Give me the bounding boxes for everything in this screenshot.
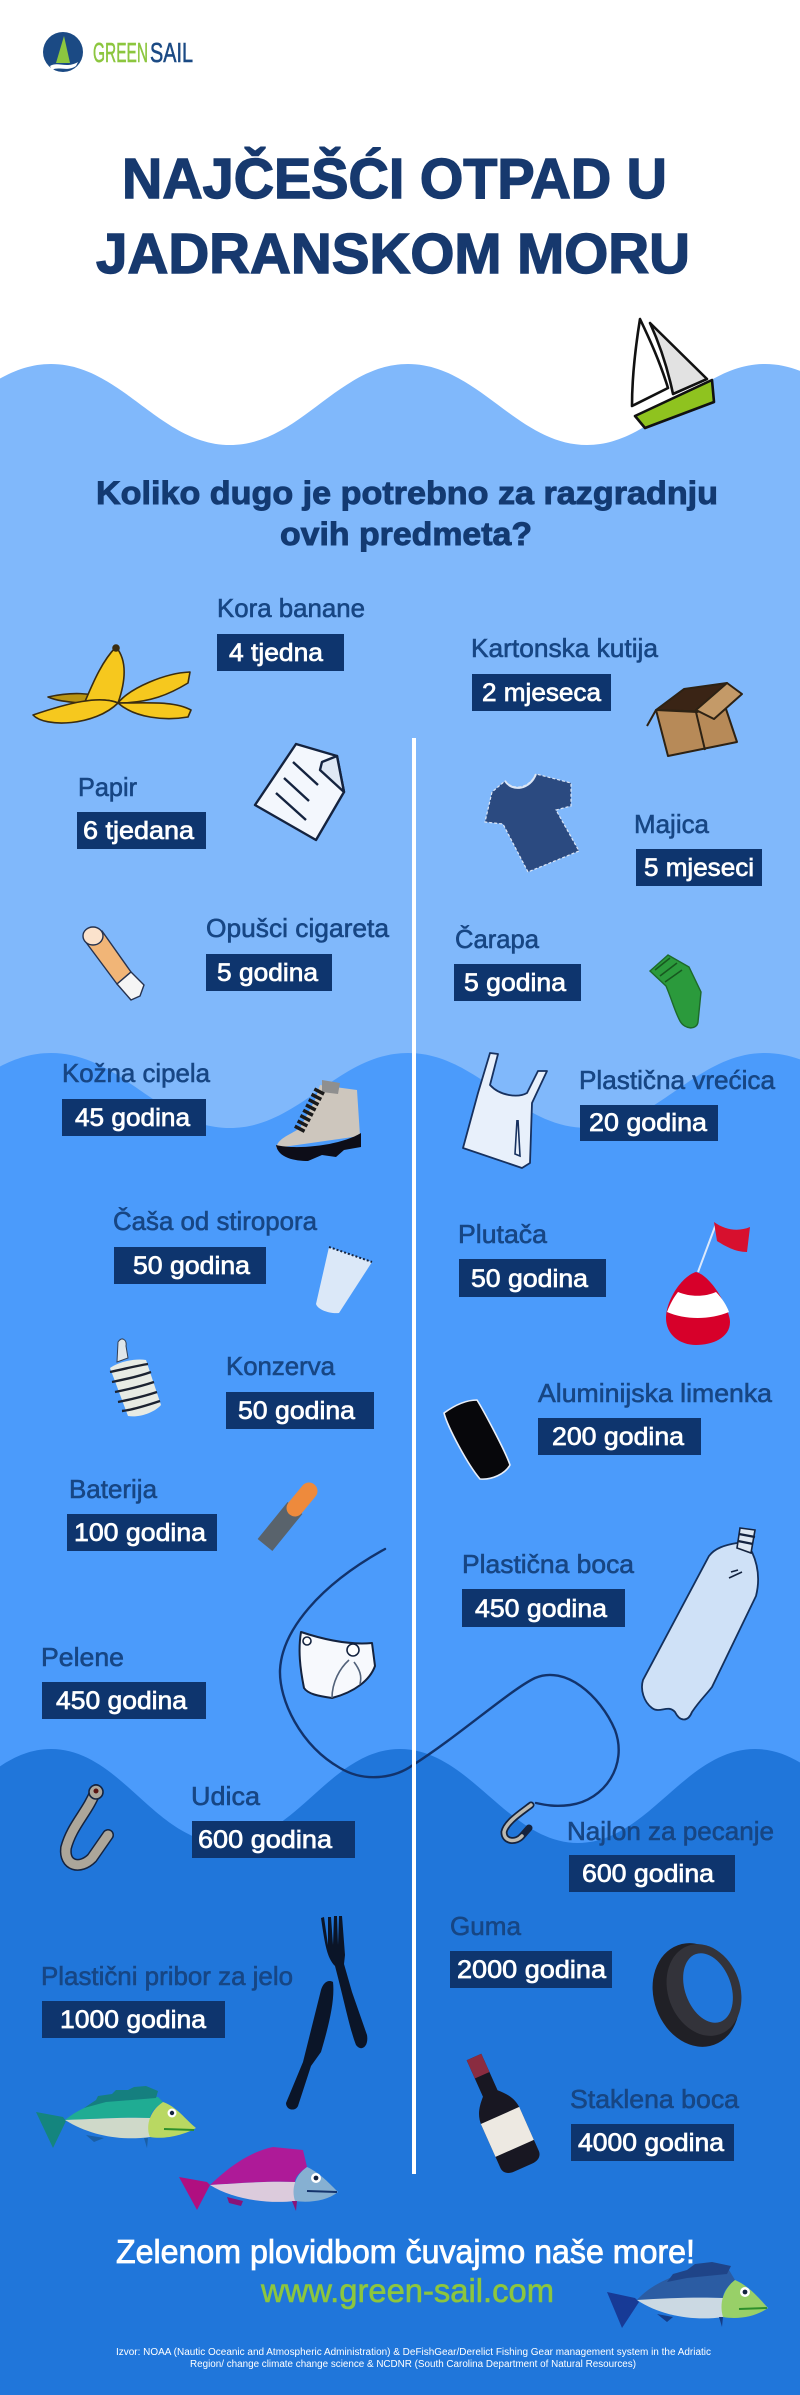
item: Kartonska kutija	[471, 633, 742, 756]
item: Pelene	[41, 1632, 375, 1719]
title: NAJČEŠĆI OTPAD U	[122, 146, 667, 211]
icon: sailboat	[632, 319, 714, 428]
duration badge	[206, 954, 332, 991]
icon: foam cup	[316, 1247, 372, 1313]
item: Kožna cipela	[62, 1058, 361, 1161]
item: Opušci cigareta	[83, 913, 390, 1000]
icon: plastic bottle	[642, 1528, 758, 1720]
logo: Green Sail	[43, 32, 193, 72]
label: Plastični pribor za jelo	[41, 1961, 293, 1991]
duration badge: 50 godina	[238, 1397, 355, 1425]
item: Najlon za pecanje	[504, 1805, 774, 1892]
duration badge	[459, 1259, 606, 1297]
duration badge	[42, 1682, 206, 1719]
text block: sources	[116, 2347, 711, 2370]
duration badge	[114, 1247, 266, 1284]
divider: vertical white line	[412, 738, 416, 2174]
duration badge: 1000 godina	[60, 2006, 206, 2034]
duration badge	[67, 1514, 217, 1551]
icon: battery	[265, 1491, 309, 1545]
icon: banana peel	[33, 645, 191, 723]
duration badge	[580, 1105, 718, 1141]
duration badge	[62, 1099, 206, 1136]
duration badge: 2 mjeseca	[482, 679, 601, 707]
duration badge: 4000 godina	[578, 2129, 724, 2157]
icon: teal fish	[36, 2086, 196, 2148]
item: Papir	[77, 744, 344, 849]
link: website: www.green-sail.com	[260, 2272, 554, 2309]
duration badge	[462, 1589, 625, 1627]
duration badge	[472, 674, 611, 711]
label: Kožna cipela	[62, 1058, 211, 1088]
panel: deep water wave	[0, 1749, 800, 2395]
callout: closing slogan: Zelenom plovidbom čuvajmo naše more!	[116, 2233, 695, 2270]
duration badge: 200 godina	[552, 1423, 684, 1451]
text block: sources: Izvor: NOAA (Nautic Oceanic and Atmospheric Administration) & DeFishGear/Derelict Fishing Gear management system in the Adriatic	[116, 2347, 711, 2358]
duration badge	[42, 2001, 225, 2038]
label: Baterija	[69, 1474, 158, 1504]
icon: cigarette butt	[83, 927, 144, 1000]
item: Plastična boca	[462, 1528, 758, 1720]
item: Udica	[66, 1781, 355, 1865]
item: Plastični pribor za jelo	[41, 1916, 367, 2110]
logo: Green Sail: SAIL	[150, 37, 193, 68]
heading: question	[96, 475, 718, 552]
item: Plastična vrećica	[463, 1053, 776, 1168]
duration badge	[569, 1855, 735, 1892]
icon: tin can	[110, 1339, 161, 1416]
item: Konzerva	[110, 1339, 374, 1429]
label: Staklena boca	[570, 2084, 740, 2114]
title: JADRANSKOM MORU	[96, 222, 690, 286]
item: Plutača	[458, 1219, 750, 1345]
label: Majica	[634, 809, 710, 839]
duration badge: 4 tjedna	[229, 639, 323, 667]
heading: question: ovih predmeta?	[280, 516, 532, 552]
icon: leather boot	[276, 1080, 361, 1161]
duration badge	[192, 1821, 355, 1858]
duration badge	[226, 1392, 374, 1429]
duration badge: 450 godina	[56, 1687, 187, 1715]
icon: fork and knife	[286, 1916, 367, 2110]
duration badge: 600 godina	[198, 1826, 332, 1854]
label: Plastična vrećica	[579, 1065, 776, 1095]
duration badge: 6 tjedana	[83, 817, 194, 845]
label: Aluminijska limenka	[538, 1378, 773, 1408]
icon: wine bottle	[455, 2048, 542, 2176]
item: Staklena boca	[455, 2048, 740, 2176]
duration badge: 100 godina	[74, 1519, 206, 1547]
label: Čarapa	[455, 924, 540, 954]
duration badge: 450 godina	[475, 1595, 607, 1623]
icon: aluminium can	[444, 1400, 510, 1479]
title	[96, 146, 690, 286]
icon: diaper	[300, 1632, 375, 1698]
duration badge: 2000 godina	[457, 1956, 606, 1984]
item: Guma	[450, 1911, 754, 2059]
duration badge	[454, 964, 581, 1001]
text block: sources: Region/ change climate change science & NCDNR (South Carolina Department of Natural Resources)	[190, 2359, 636, 2370]
icon: fish hook	[66, 1785, 108, 1865]
duration badge: 5 godina	[464, 969, 566, 997]
duration badge: 45 godina	[75, 1104, 190, 1132]
duration badge: 50 godina	[133, 1252, 250, 1280]
label: Opušci cigareta	[206, 913, 390, 943]
duration badge	[450, 1951, 612, 1988]
item: Baterija	[67, 1474, 309, 1551]
item: Majica	[485, 774, 762, 886]
label: Najlon za pecanje	[567, 1816, 774, 1846]
item: Kora banane	[33, 593, 365, 723]
item: Aluminijska limenka	[444, 1378, 773, 1479]
icon: green sock	[650, 955, 701, 1028]
label: Kora banane	[217, 593, 365, 623]
icon: plastic bag	[463, 1053, 547, 1168]
icon: cardboard box	[647, 683, 742, 756]
icon: magenta fish	[179, 2147, 338, 2211]
duration badge	[636, 849, 762, 886]
label: Konzerva	[226, 1351, 336, 1381]
label: Čaša od stiropora	[113, 1206, 318, 1236]
icon: sheet of paper	[255, 744, 344, 840]
item: Čarapa	[454, 924, 701, 1028]
duration badge: 600 godina	[582, 1860, 714, 1888]
duration badge: 5 mjeseci	[644, 854, 754, 882]
icon: t-shirt	[485, 774, 579, 872]
duration badge	[571, 2124, 734, 2161]
label: Guma	[450, 1911, 522, 1941]
icon: blue fish	[607, 2262, 768, 2328]
duration badge: 5 godina	[217, 959, 318, 987]
icon: buoy with flag	[666, 1222, 750, 1345]
label: Plastična boca	[462, 1549, 635, 1579]
duration badge	[538, 1418, 701, 1455]
duration badge: 20 godina	[589, 1109, 707, 1137]
label: Udica	[191, 1781, 261, 1811]
label: Plutača	[458, 1219, 548, 1249]
duration badge	[77, 812, 206, 849]
icon: tyre	[638, 1931, 754, 2059]
duration badge: 50 godina	[471, 1265, 588, 1293]
label: Pelene	[41, 1642, 124, 1672]
label: Papir	[78, 772, 137, 802]
fishing line	[280, 1549, 619, 1806]
item: Čaša od stiropora	[113, 1206, 372, 1313]
label: Kartonska kutija	[471, 633, 659, 663]
panel: mid water wave	[0, 1053, 800, 2395]
logo: Green Sail: GREEN	[93, 37, 148, 68]
heading: question: Koliko dugo je potrebno za razgradnju	[96, 475, 718, 511]
duration badge	[217, 634, 344, 671]
icon: hook on nylon line	[504, 1805, 531, 1841]
